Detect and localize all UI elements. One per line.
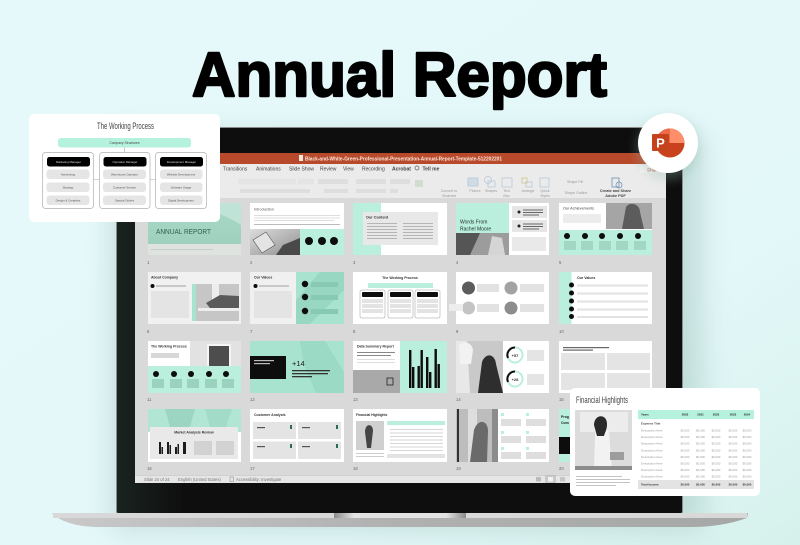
ribbon icons bbox=[468, 176, 622, 188]
column: development: Website Development bbox=[167, 172, 195, 176]
table rows: $0,000 bbox=[743, 468, 752, 472]
card: financial highlights bbox=[570, 388, 760, 496]
column: marketing: Advertising bbox=[61, 172, 76, 176]
slide number 2: 2 bbox=[250, 260, 253, 265]
table total row bbox=[638, 480, 754, 489]
status bar: Accessibility: Investigate bbox=[236, 477, 282, 482]
status bar: Slide 24 of 24 bbox=[144, 477, 170, 482]
table header: 2021 bbox=[697, 412, 704, 416]
table rows: $0,000 bbox=[743, 448, 752, 452]
ribbon tabs: Recording bbox=[362, 166, 385, 172]
slide 3: our content: Our Content bbox=[366, 216, 389, 220]
slide 10: our values list bbox=[559, 272, 652, 324]
table total row: $0,000 bbox=[743, 482, 752, 486]
slide number 18: 18 bbox=[353, 466, 358, 471]
table rows: $0,000 bbox=[729, 455, 738, 459]
slide 5: our achievements: Our Achievements bbox=[563, 206, 594, 210]
description text bbox=[576, 476, 630, 486]
bar chart bbox=[409, 349, 440, 388]
column: operation: Operation Manager bbox=[113, 160, 137, 164]
table rows: $0,000 bbox=[681, 462, 690, 466]
slide 12: +14 bbox=[250, 341, 344, 393]
slide 20: program partly hidden: Com bbox=[561, 421, 569, 425]
table total row: Total Income bbox=[641, 482, 659, 486]
financial table bbox=[638, 410, 754, 489]
column: operation: Warehouse Operator bbox=[111, 172, 138, 176]
table rows: $0,000 bbox=[712, 462, 721, 466]
table rows: $0,000 bbox=[712, 442, 721, 446]
create and share adobe pdf: Adobe PDF bbox=[605, 194, 626, 198]
ribbon labels: Quick bbox=[540, 189, 550, 193]
table rows: $0,000 bbox=[681, 435, 690, 439]
slide number 9: 9 bbox=[456, 329, 459, 334]
ribbon labels bbox=[441, 180, 587, 198]
slide 9: team bbox=[449, 272, 549, 324]
ribbon tabs: Review bbox=[320, 166, 337, 172]
create and share adobe pdf bbox=[600, 189, 631, 198]
icon: powerpoint badge: P bbox=[656, 136, 665, 150]
table rows: $0,000 bbox=[743, 462, 752, 466]
slide 13: data summary report bbox=[353, 341, 447, 393]
table rows: $0,000 bbox=[712, 428, 721, 432]
ribbon tabs: Animations bbox=[256, 166, 281, 172]
ribbon tabs: Slide Show bbox=[289, 166, 314, 172]
slide 11: working process timeline: The Working Process bbox=[151, 344, 187, 348]
financial table: Expense Title bbox=[641, 422, 661, 426]
table rows: $0,000 bbox=[743, 442, 752, 446]
slide 3: our content bbox=[353, 203, 447, 255]
slide number 7: 7 bbox=[250, 329, 253, 334]
slide 18: financial highlights: Financial Highlights bbox=[356, 413, 387, 417]
table rows: $0,000 bbox=[729, 448, 738, 452]
table rows: $0,000 bbox=[729, 468, 738, 472]
slide 16: market analysis review bbox=[148, 409, 241, 462]
slide number 8: 8 bbox=[353, 329, 356, 334]
slide 14: rings: +57 bbox=[512, 353, 519, 358]
table rows: $0,000 bbox=[681, 455, 690, 459]
table rows: $0,000 bbox=[729, 475, 738, 479]
slide number 13: 13 bbox=[353, 397, 358, 402]
slide 1: annual report cover: ANNUAL REPORT bbox=[156, 227, 211, 236]
title bar: Black-and-White-Green-Professional-Presentation-Annual-Report-Template-512202201 bbox=[305, 156, 502, 162]
column: operation: Special Orders bbox=[115, 198, 135, 202]
table rows: Description Here bbox=[641, 455, 663, 459]
ribbon labels: Convert to bbox=[441, 189, 457, 193]
table rows: $0,000 bbox=[696, 475, 705, 479]
slide 13: data summary report: Data Summary Report bbox=[357, 344, 395, 348]
table rows: Description Here bbox=[641, 428, 663, 432]
table header: 2020 bbox=[682, 412, 689, 416]
table rows: $0,000 bbox=[712, 468, 721, 472]
column: operation bbox=[100, 152, 150, 208]
table rows: $0,000 bbox=[681, 468, 690, 472]
slide 12: +14: +14 bbox=[292, 359, 305, 368]
slide number 15: 15 bbox=[559, 397, 564, 402]
title: Annual Report bbox=[192, 41, 607, 110]
ribbon labels: Box bbox=[503, 194, 510, 198]
slide number 10: 10 bbox=[559, 329, 564, 334]
table rows: Description Here bbox=[641, 475, 663, 479]
table rows: Description Here bbox=[641, 442, 663, 446]
slide 4: words from rachel moore: Words From bbox=[460, 220, 487, 226]
column: development bbox=[156, 152, 206, 208]
column: development: Digital Development bbox=[168, 198, 194, 202]
photo: woman with tablet bbox=[575, 410, 632, 470]
ribbon labels: Arrange bbox=[522, 189, 534, 193]
slide number 5: 5 bbox=[559, 260, 562, 265]
column: marketing bbox=[42, 152, 94, 208]
table rows: $0,000 bbox=[729, 428, 738, 432]
table header: 2023 bbox=[730, 412, 737, 416]
table rows: $0,000 bbox=[696, 442, 705, 446]
slide 14: rings: +28 bbox=[512, 377, 519, 382]
slide number 1: 1 bbox=[147, 260, 150, 265]
table header bbox=[638, 410, 754, 419]
table rows: $0,000 bbox=[743, 428, 752, 432]
ribbon tabs bbox=[223, 166, 440, 172]
slide number 12: 12 bbox=[250, 397, 255, 402]
table header: 2024 bbox=[744, 412, 751, 416]
slide number 14: 14 bbox=[456, 397, 461, 402]
icon: powerpoint badge bbox=[636, 113, 700, 180]
slide 4: words from rachel moore bbox=[456, 203, 549, 255]
slide number 20: 20 bbox=[559, 466, 564, 471]
slide 14: rings bbox=[456, 341, 549, 393]
slide 2: introduction: Introduction bbox=[254, 208, 274, 212]
table rows: $0,000 bbox=[681, 428, 690, 432]
column: marketing: Marketing Manager bbox=[56, 160, 81, 164]
slide 7: our values bbox=[250, 272, 344, 324]
table rows bbox=[641, 428, 752, 479]
slide number 6: 6 bbox=[147, 329, 150, 334]
table rows: $0,000 bbox=[696, 462, 705, 466]
laptop bbox=[52, 128, 748, 529]
ribbon tabs: View bbox=[343, 166, 354, 172]
table rows: $0,000 bbox=[743, 435, 752, 439]
table header: 2022 bbox=[713, 412, 720, 416]
ribbon bbox=[135, 164, 666, 198]
column: operation: Customer Service bbox=[113, 185, 136, 189]
table rows: $0,000 bbox=[712, 455, 721, 459]
ribbon labels: Styles bbox=[540, 194, 550, 198]
table rows: $0,000 bbox=[696, 435, 705, 439]
table rows: Description Here bbox=[641, 462, 663, 466]
title bar bbox=[135, 153, 666, 164]
column: development: Development Manager bbox=[167, 160, 196, 164]
table rows: Description Here bbox=[641, 435, 663, 439]
slide 7: our values: Our Values bbox=[254, 276, 272, 280]
slide 11: working process timeline bbox=[148, 341, 241, 393]
table rows: $0,000 bbox=[681, 442, 690, 446]
company structures bar bbox=[58, 138, 191, 148]
slide number 4: 4 bbox=[456, 260, 459, 265]
status bar bbox=[135, 475, 666, 483]
slide 20: program partly hidden: Prog bbox=[561, 415, 569, 419]
ribbon labels: Shape Outline bbox=[565, 191, 587, 195]
slide 6: about company bbox=[148, 272, 241, 324]
slide number 16: 16 bbox=[147, 466, 152, 471]
create and share adobe pdf: Create and Share bbox=[600, 189, 631, 193]
slide 19: photo and items bbox=[456, 409, 549, 462]
table rows: $0,000 bbox=[696, 448, 705, 452]
slide number 19: 19 bbox=[456, 466, 461, 471]
slide 17: customer analysis: Customer Analysis bbox=[254, 413, 286, 417]
slide number 11: 11 bbox=[147, 397, 152, 402]
slide sorter background bbox=[135, 198, 666, 483]
table rows: Description Here bbox=[641, 448, 663, 452]
laptop bezel bbox=[116, 128, 682, 514]
table rows: $0,000 bbox=[681, 448, 690, 452]
table rows: $0,000 bbox=[729, 462, 738, 466]
table rows: $0,000 bbox=[696, 455, 705, 459]
slide 17: customer analysis bbox=[250, 409, 344, 462]
slide 18: financial highlights bbox=[353, 409, 447, 462]
share button bbox=[640, 166, 666, 173]
laptop base bbox=[52, 513, 748, 527]
table total row: $0,000 bbox=[696, 482, 705, 486]
table total row: $0,000 bbox=[712, 482, 721, 486]
table total row: $0,000 bbox=[681, 482, 690, 486]
company structures bar: Company Structures bbox=[109, 141, 140, 145]
slide 16: market analysis review: Market Analysis Review bbox=[174, 430, 214, 434]
slide 5: our achievements bbox=[559, 203, 652, 255]
slide 15: stat boxes bbox=[559, 341, 652, 393]
table total row: $0,000 bbox=[729, 482, 738, 486]
slide 1: annual report cover bbox=[148, 203, 241, 255]
ribbon labels: Shape Fill bbox=[567, 180, 583, 184]
card: the working process bbox=[29, 114, 220, 222]
ribbon tabs: Acrobat bbox=[392, 166, 411, 172]
card title: The Working Process bbox=[97, 121, 154, 131]
slide number 17: 17 bbox=[250, 466, 255, 471]
status bar: English (United States) bbox=[178, 477, 221, 482]
card title: Financial Highlights bbox=[576, 395, 628, 406]
ribbon labels: Picture bbox=[469, 189, 481, 193]
powerpoint window bbox=[135, 153, 666, 483]
table rows: $0,000 bbox=[729, 442, 738, 446]
table header: Years bbox=[641, 412, 649, 416]
table rows: $0,000 bbox=[743, 455, 752, 459]
column: marketing: Design & Creatives bbox=[56, 198, 81, 202]
table rows: Description Here bbox=[641, 468, 663, 472]
table rows: $0,000 bbox=[712, 435, 721, 439]
slide 6: about company: About Company bbox=[151, 276, 178, 280]
table rows: $0,000 bbox=[729, 435, 738, 439]
column: development: Software Usage bbox=[171, 185, 192, 189]
ribbon controls bbox=[238, 178, 423, 193]
column: marketing: Strategy bbox=[63, 185, 74, 189]
table rows: $0,000 bbox=[681, 475, 690, 479]
share button: Share bbox=[647, 168, 660, 172]
table rows: $0,000 bbox=[743, 475, 752, 479]
table rows: $0,000 bbox=[712, 475, 721, 479]
table rows: $0,000 bbox=[712, 448, 721, 452]
slide 10: our values list: Our Values bbox=[577, 276, 595, 280]
ribbon labels: Text bbox=[503, 189, 510, 193]
ribbon labels: Smartart bbox=[442, 194, 456, 198]
slide number 3: 3 bbox=[353, 260, 356, 265]
slide 2: introduction bbox=[250, 203, 344, 255]
ribbon labels: Shapes bbox=[485, 189, 497, 193]
ribbon tabs: Tell me bbox=[422, 166, 440, 172]
table rows: $0,000 bbox=[696, 468, 705, 472]
table rows: $0,000 bbox=[696, 428, 705, 432]
slide 20: program partly hidden bbox=[559, 409, 571, 462]
slide 8: the working process bbox=[353, 272, 447, 324]
slide 4: words from rachel moore: Rachel Moore bbox=[460, 226, 491, 232]
slide 8: the working process: The Working Process bbox=[382, 276, 418, 280]
ribbon tabs: Transitions bbox=[223, 166, 248, 172]
